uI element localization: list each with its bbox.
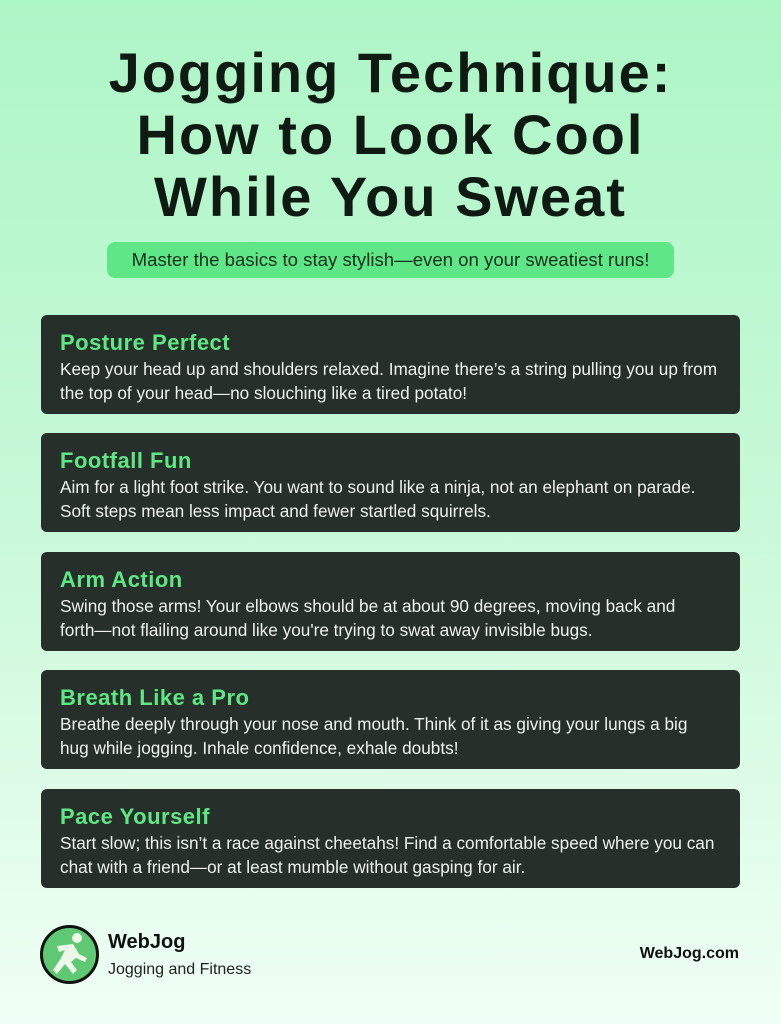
panel: arm action: Swing those arms! Your elbows should be at about 90 degrees, moving back and bbox=[60, 596, 675, 616]
title: How to Look Cool bbox=[137, 103, 644, 166]
panel: pace: Pace Yourself bbox=[60, 804, 210, 829]
panel: pace: chat with a friend—or at least mumble without gasping for air. bbox=[60, 857, 525, 877]
title: While You Sweat bbox=[154, 165, 627, 228]
title: Jogging Technique: bbox=[109, 41, 672, 104]
panel: arm action bbox=[41, 552, 740, 651]
subtitle pill: Master the basics to stay stylish—even on your sweatiest runs! bbox=[132, 249, 649, 270]
panel: footfall: Aim for a light foot strike. You want to sound like a ninja, not an elephant on parade. bbox=[60, 477, 695, 497]
panel: breath: Breath Like a Pro bbox=[60, 685, 249, 710]
panel: arm action: Arm Action bbox=[60, 567, 183, 592]
panel: pace bbox=[41, 789, 740, 888]
title bbox=[109, 41, 672, 228]
panel: arm action: forth—not flailing around like you're trying to swat away invisible bugs. bbox=[60, 620, 593, 640]
panel: posture: the top of your head—no slouching like a tired potato! bbox=[60, 383, 467, 403]
panel: breath: hug while jogging. Inhale confidence, exhale doubts! bbox=[60, 738, 458, 758]
brand name: WebJog bbox=[108, 931, 185, 953]
panel: footfall: Footfall Fun bbox=[60, 448, 192, 473]
panel: footfall bbox=[41, 433, 740, 532]
url: WebJog.com bbox=[640, 945, 739, 962]
panel: breath: Breathe deeply through your nose and mouth. Think of it as giving your lungs a big bbox=[60, 714, 687, 734]
icon: logo runner bbox=[40, 925, 99, 984]
panel: breath bbox=[41, 670, 740, 769]
tagline: Jogging and Fitness bbox=[108, 961, 251, 978]
panel: posture: Keep your head up and shoulders relaxed. Imagine there’s a string pulling you up from bbox=[60, 359, 717, 379]
panel: pace: Start slow; this isn’t a race against cheetahs! Find a comfortable speed where you can bbox=[60, 833, 714, 853]
subtitle pill bbox=[107, 242, 674, 278]
panel: posture: Posture Perfect bbox=[60, 330, 230, 355]
panel: footfall: Soft steps mean less impact and fewer startled squirrels. bbox=[60, 501, 491, 521]
panel: posture bbox=[41, 315, 740, 414]
